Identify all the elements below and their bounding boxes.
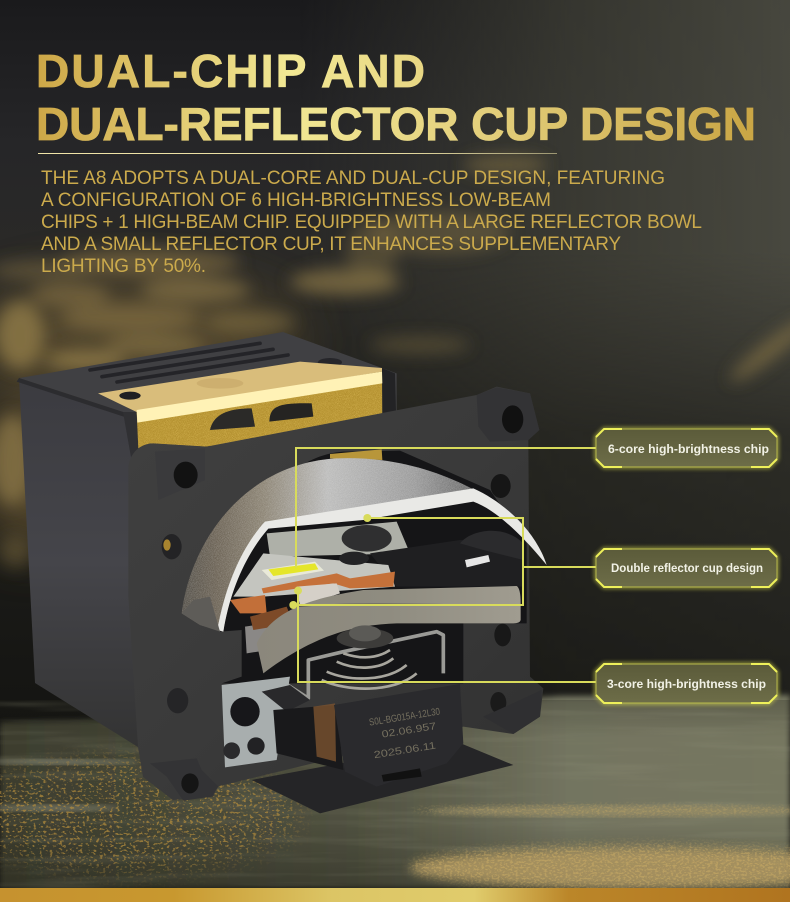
gold heat sink strip [98, 362, 383, 450]
solenoid block: S0L-BG015A-12L30 [368, 706, 441, 729]
title: DUAL-CHIP AND [36, 45, 425, 97]
title: DUAL-REFLECTOR CUP DESIGN [36, 98, 756, 150]
description text: A CONFIGURATION OF 6 HIGH-BRIGHTNESS LOW-BEAM [41, 190, 551, 211]
callout: double reflector cup design [596, 549, 777, 587]
leader lines [289, 448, 597, 682]
callout: 3-core high-brightness chip: 3-core high-brightness chip [607, 679, 766, 691]
lower silver mount and screws [222, 677, 290, 767]
solenoid block [262, 684, 463, 787]
description text: THE A8 ADOPTS A DUAL-CORE AND DUAL-CUP DESIGN, FEATURING [41, 168, 665, 189]
solenoid block: 02.06.957 [381, 721, 438, 741]
inner housing and LED board [230, 522, 523, 653]
solenoid block: 2025.06.11 [373, 740, 437, 761]
divider [38, 153, 557, 154]
callout: 6-core high-brightness chip [596, 429, 777, 467]
small reflector cup [257, 586, 521, 673]
description text: LIGHTING BY 50%. [41, 256, 206, 277]
title [36, 45, 756, 150]
dark inner opening [220, 451, 527, 683]
bottom plate [252, 742, 513, 813]
callout: double reflector cup design: Double reflector cup design [611, 563, 763, 575]
front mounting plate [128, 387, 543, 801]
spring and bracket [262, 625, 443, 698]
bottom gold bar [0, 888, 790, 902]
description text [41, 168, 702, 277]
rear housing [17, 332, 397, 747]
callout: 6-core high-brightness chip: 6-core high-brightness chip [608, 444, 769, 456]
description text: CHIPS + 1 HIGH-BEAM CHIP. EQUIPPED WITH A LARGE REFLECTOR BOWL [41, 212, 702, 233]
description text: AND A SMALL REFLECTOR CUP, IT ENHANCES SUPPLEMENTARY [41, 234, 621, 255]
callout: 3-core high-brightness chip [596, 664, 777, 703]
large reflector bowl [180, 453, 547, 633]
product: dual-reflector lamp module [17, 332, 597, 813]
